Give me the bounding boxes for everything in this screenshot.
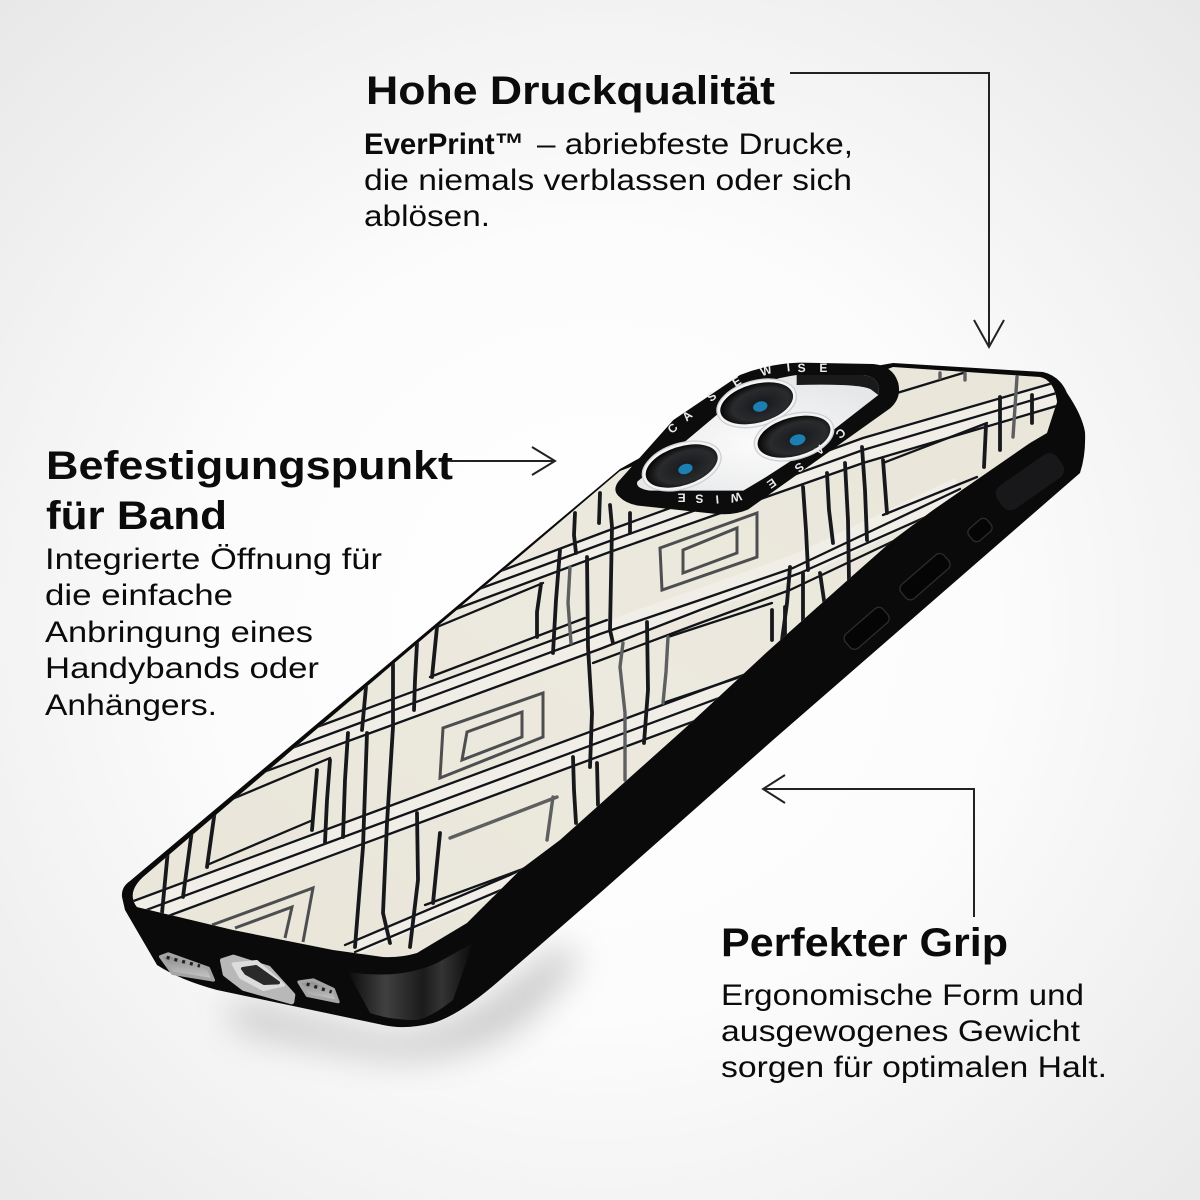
brand ring lettering: C [665,420,681,436]
rectangles row two [207,603,772,865]
heading: Perfekter Grip [721,921,1008,965]
brand ring lettering: A [679,408,695,424]
window shading [797,375,879,395]
case body [122,363,1085,1027]
brand ring lettering: I [715,492,720,506]
heading: Hohe Druckqualität [366,69,775,113]
callout: grip [721,921,1107,1084]
callout: strap attachment [45,444,453,722]
heading: für Band [46,494,227,538]
brand ring lettering: C [833,425,848,442]
body text: ablösen. [364,200,490,233]
camera bump [615,363,899,514]
brand ring lettering: E [819,361,827,375]
body text: Anbringung eines [45,616,313,649]
body text: EverPrint™ [364,128,524,161]
side buttons [842,449,1068,652]
bottom ports [161,954,338,1002]
plaid pattern [120,373,1060,952]
brand ring lettering [665,360,848,506]
arrow: strap attachment [450,447,555,475]
heading: Befestigungspunkt [46,444,453,488]
brand ring lettering: E [678,490,686,504]
brand ring lettering: W [758,362,774,379]
arrow: grip [763,775,974,917]
body text: Ergonomische Form und [721,979,1084,1012]
rectangles row three [212,797,557,942]
body text [45,543,382,722]
body text [721,979,1107,1084]
brand ring lettering: S [695,492,704,506]
drop shadow under phone [225,945,580,1057]
camera window [637,375,879,491]
body text [364,128,853,233]
camera module [615,360,899,514]
body text: Anhängers. [45,689,217,722]
long diagonal bands [120,373,1060,952]
callout: print quality [364,69,853,233]
brand ring lettering: S [792,459,807,475]
vertical bands [162,373,1032,947]
lighter plaid bands [130,392,1060,948]
body text: ausgewogenes Gewicht [721,1015,1081,1048]
brand ring lettering: I [786,360,791,374]
body text: Handybands oder [45,652,319,685]
heading [46,444,453,538]
body text: sorgen für optimalen Halt. [721,1051,1107,1084]
body text: – abriebfeste Drucke, [537,128,853,161]
brand ring lettering: W [728,489,743,506]
brand ring lettering: A [811,442,827,458]
brand ring lettering: S [704,389,719,405]
lens left [636,432,727,500]
brand ring lettering: E [730,374,744,390]
lens top [712,371,802,436]
lens right [749,404,839,469]
rectangles row one [430,423,987,677]
body text: die einfache [45,579,233,612]
body text: Integrierte Öffnung für [45,543,382,576]
brand ring lettering: S [797,361,806,375]
brand ring lettering: E [764,475,779,491]
body text: die niemals verblassen oder sich [364,164,852,197]
corner highlight [348,943,473,1020]
phone case [120,360,1085,1027]
arrow: print quality [790,73,1004,347]
printed back face [133,367,1057,957]
